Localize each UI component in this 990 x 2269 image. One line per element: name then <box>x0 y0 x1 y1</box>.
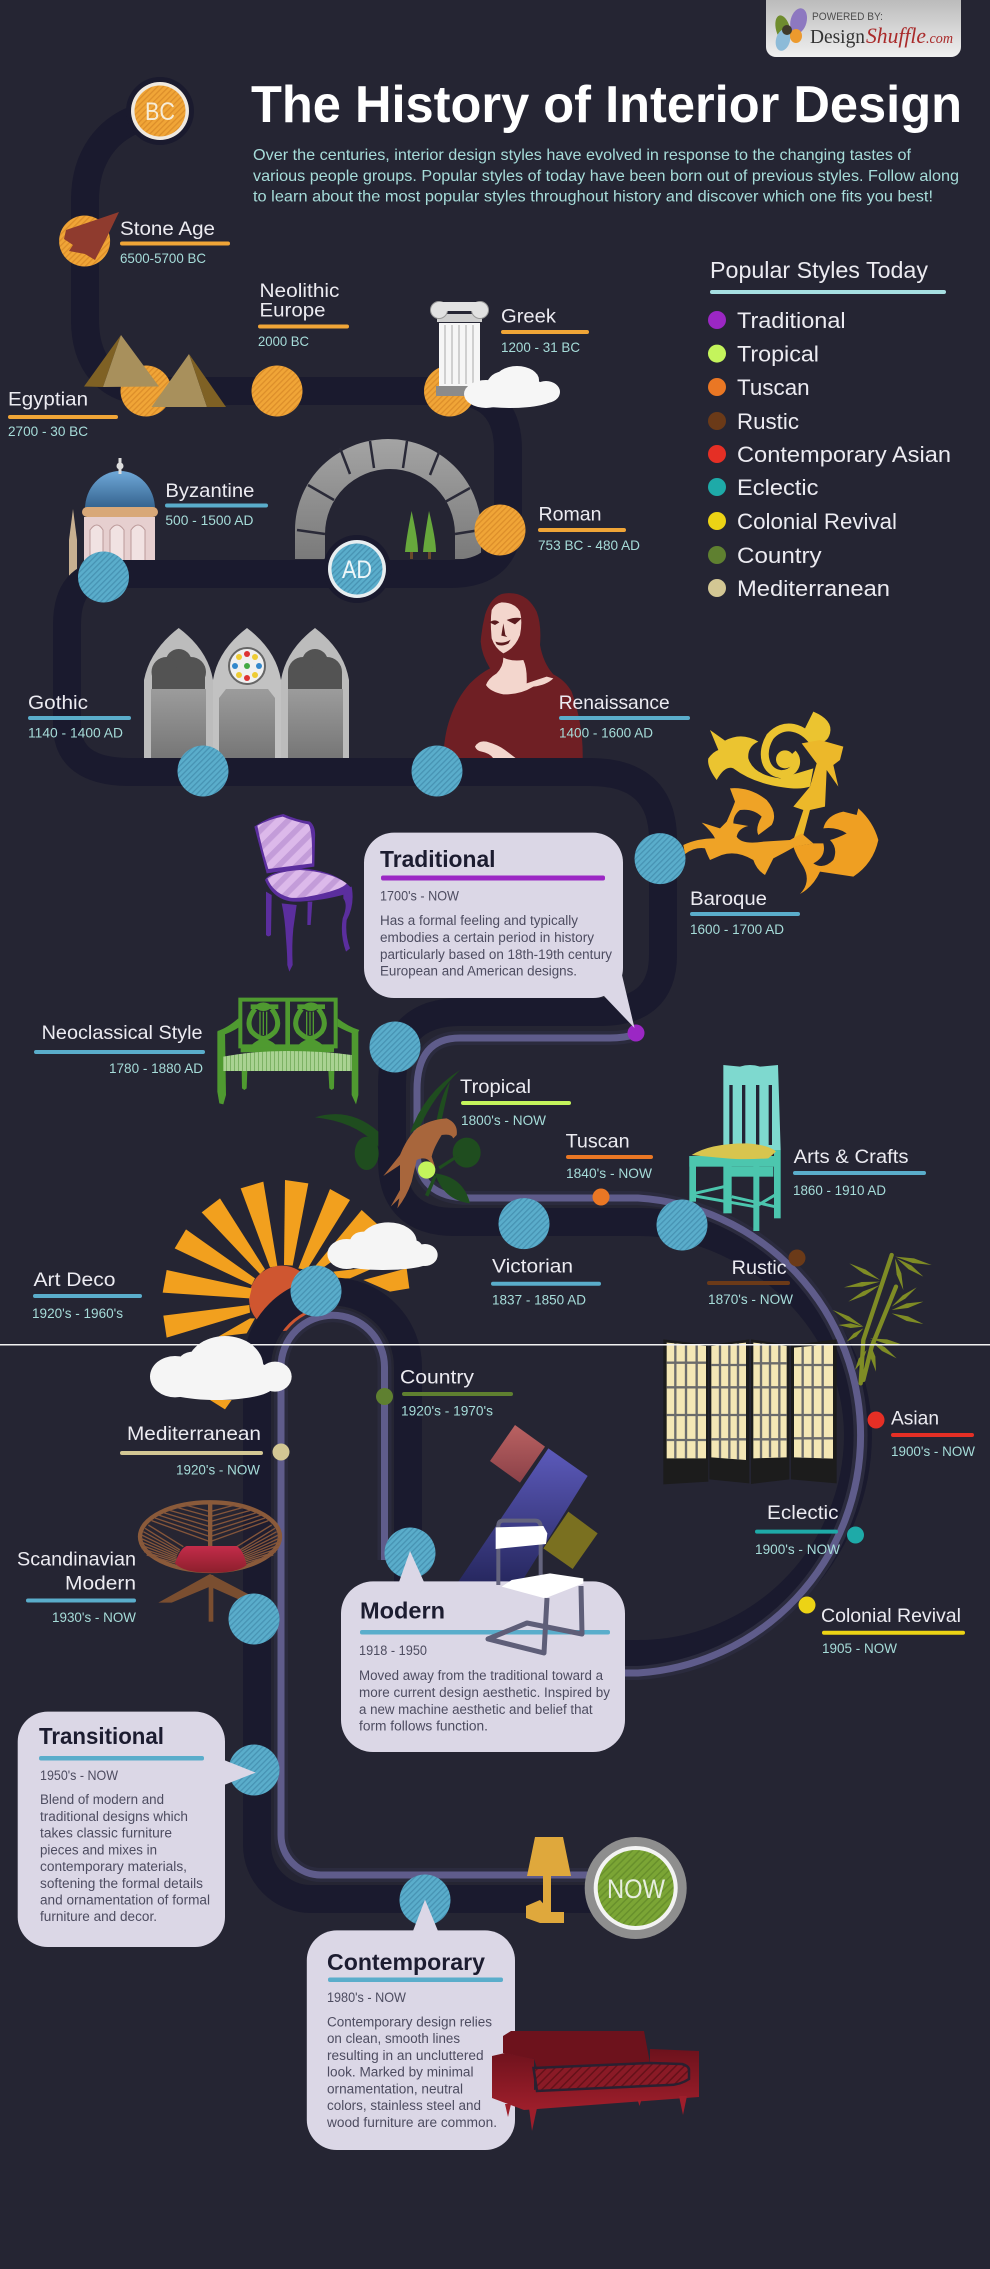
NOW marker <box>585 1837 687 1939</box>
label: Neolithic Europe: 2000 BC <box>258 333 309 349</box>
label: Baroque: 1600 - 1700 AD <box>690 921 784 937</box>
label: Gothic: Gothic <box>28 692 88 714</box>
label: Greek <box>501 306 589 355</box>
label: Victorian <box>491 1256 601 1308</box>
label: Tropical: Tropical <box>460 1076 531 1098</box>
callout: Contemporary: wood furniture are common. <box>326 2115 497 2130</box>
callout: Transitional: contemporary materials, <box>40 1859 187 1874</box>
BC marker: BC <box>145 98 175 126</box>
label: Art Deco <box>32 1269 142 1321</box>
label: Byzantine: 500 - 1500 AD <box>165 512 253 528</box>
label: Eclectic: Eclectic <box>767 1502 839 1524</box>
panel: popular styles legend: Colonial Revival <box>737 509 897 534</box>
logo: Design Shuffle <box>766 0 961 57</box>
panel: popular styles legend: Popular Styles Today <box>710 257 928 283</box>
label: Tuscan: Tuscan <box>566 1130 630 1152</box>
callout: Traditional: Has a formal feeling and typically <box>380 913 578 928</box>
label: Tropical <box>460 1076 571 1128</box>
label: Neolithic Europe: Europe <box>260 300 326 322</box>
callout: Transitional: Transitional <box>39 1723 164 1749</box>
callout: Modern: Modern <box>360 1598 445 1624</box>
callout: Modern: more current design aesthetic. Inspired by <box>359 1685 610 1700</box>
label: Byzantine <box>165 480 268 528</box>
callout: Transitional: and ornamentation of formal <box>40 1893 210 1908</box>
callout: Contemporary <box>307 1900 515 2150</box>
label: Eclectic <box>755 1502 841 1557</box>
callout: Transitional: Blend of modern and <box>40 1792 164 1807</box>
label: Colonial Revival <box>821 1605 965 1656</box>
label: Scandinavian Modern: Modern <box>65 1572 136 1594</box>
callout: Traditional <box>364 833 634 1028</box>
timeline track <box>67 115 858 1899</box>
panel: popular styles legend: Tropical <box>737 342 819 367</box>
callout: Modern <box>341 1551 625 1752</box>
label: Mediterranean: 1920's - NOW <box>176 1462 261 1478</box>
callout: Contemporary: resulting in an uncluttered <box>327 2048 484 2063</box>
panel: popular styles legend: Traditional <box>737 308 846 333</box>
label: Greek: Greek <box>501 306 556 328</box>
NOW marker: NOW <box>607 1874 665 1904</box>
label: Gothic: 1140 - 1400 AD <box>28 725 123 741</box>
label: Byzantine: Byzantine <box>165 480 254 502</box>
callout: Traditional: particularly based on 18th-19th century <box>380 947 612 962</box>
horizontal divider <box>0 1344 990 1346</box>
illustration: red sofa <box>492 2031 699 2131</box>
label: Tuscan: 1840's - NOW <box>566 1165 653 1181</box>
label: Arts and Crafts: 1860 - 1910 AD <box>793 1182 886 1198</box>
illustration: Neoclassical bench <box>217 998 359 1104</box>
label: Roman: 753 BC - 480 AD <box>538 537 640 553</box>
icon: Greek column with cloud <box>430 302 560 408</box>
label: Art Deco: 1920's - 1960's <box>32 1305 123 1321</box>
logo: Design Shuffle: POWERED BY: <box>812 11 883 23</box>
illustration: bamboo <box>833 1255 932 1383</box>
callout: Contemporary: Contemporary design relies <box>327 2015 492 2030</box>
label: Neoclassical Style: 1780 - 1880 AD <box>109 1060 203 1076</box>
callout: Contemporary: colors, stainless steel and <box>327 2098 481 2113</box>
panel: popular styles legend: Contemporary Asian <box>737 442 951 467</box>
panel: popular styles legend: Mediterranean <box>737 576 890 601</box>
label: Scandinavian Modern: Scandinavian <box>17 1549 136 1571</box>
panel: popular styles legend: Country <box>737 543 822 568</box>
label: Rustic: Rustic <box>732 1257 787 1279</box>
callout: Contemporary: ornamentation, neutral <box>327 2082 463 2097</box>
panel: popular styles legend: Rustic <box>737 409 799 434</box>
panel: popular styles legend <box>708 257 951 601</box>
label: Renaissance: Renaissance <box>559 692 670 714</box>
label: Eclectic: 1900's - NOW <box>755 1541 841 1557</box>
callout: Transitional: pieces and mixes in <box>40 1843 157 1858</box>
label: Asian: 1900's - NOW <box>891 1443 976 1459</box>
title: The History of Interior Design <box>251 76 962 134</box>
illustration: Roman stone arch <box>295 439 481 559</box>
label: Egyptian: Egyptian <box>8 389 88 411</box>
label: Renaissance: 1400 - 1600 AD <box>559 725 653 741</box>
label: Egyptian: 2700 - 30 BC <box>8 423 88 439</box>
label: Stone Age: 6500-5700 BC <box>120 250 206 266</box>
label: Country <box>400 1366 513 1419</box>
callout: Transitional <box>18 1712 256 1947</box>
label: Arts and Crafts: Arts & Crafts <box>794 1146 909 1168</box>
label: Country: 1920's - 1970's <box>401 1403 493 1419</box>
label: Egyptian <box>8 389 118 439</box>
callout: Traditional: European and American designs. <box>380 964 577 979</box>
callout: Contemporary: look. Marked by minimal <box>327 2065 474 2080</box>
AD marker: AD <box>342 556 372 584</box>
label: Scandinavian Modern: 1930's - NOW <box>52 1609 137 1625</box>
panel: popular styles legend: Eclectic <box>737 475 818 500</box>
label: Neoclassical Style <box>34 1022 205 1076</box>
illustration: Modern tubular chair <box>488 1521 583 1653</box>
illustration: tropical parrot and leaves <box>315 1070 481 1208</box>
illustration: Scandinavian rattan chair <box>140 1502 280 1622</box>
illustration: Byzantine dome <box>69 458 158 592</box>
illustration: Arts and Crafts chair <box>689 1065 781 1231</box>
AD marker <box>323 535 391 603</box>
label: Neolithic Europe: Neolithic <box>260 280 340 302</box>
label: Renaissance <box>559 692 690 741</box>
callout: Transitional: takes classic furniture <box>40 1826 172 1840</box>
callout: Modern: form follows function. <box>359 1719 488 1734</box>
callout: Transitional: traditional designs which <box>40 1809 188 1824</box>
callout: Traditional: Traditional <box>380 846 496 872</box>
label: Tuscan <box>566 1130 653 1181</box>
label: Colonial Revival: Colonial Revival <box>821 1605 961 1627</box>
label: Colonial Revival: 1905 - NOW <box>822 1640 898 1656</box>
intro text: Over the centuries, interior design styles have evolved in response to the changing tastes of <box>253 147 912 164</box>
label: Tropical: 1800's - NOW <box>461 1112 547 1128</box>
timeline nodes: blue AD era <box>78 552 708 1926</box>
callout: Contemporary: 1980's - NOW <box>327 1989 407 2005</box>
logo: Design Shuffle: .com <box>926 31 953 47</box>
label: Roman <box>538 504 640 553</box>
callout: Traditional: 1700's - NOW <box>380 888 460 904</box>
illustration: lamp <box>526 1837 571 1923</box>
label: Asian <box>891 1408 976 1459</box>
label: Greek: 1200 - 31 BC <box>501 339 580 355</box>
BC marker <box>126 77 194 145</box>
label: Rustic <box>707 1257 794 1307</box>
icon: stone arrowhead <box>64 212 119 260</box>
label: Mediterranean <box>120 1423 263 1478</box>
clouds over art deco sun <box>150 1222 438 1400</box>
label: Country: Country <box>400 1366 474 1388</box>
label: Stone Age: Stone Age <box>120 218 215 240</box>
purple line: popular styles path <box>281 1034 861 1875</box>
icon: pyramids <box>84 335 226 407</box>
timeline nodes: orange BC era <box>59 216 525 556</box>
label: Baroque <box>690 888 800 937</box>
callout: Modern: 1918 - 1950 <box>359 1642 427 1658</box>
label: Neoclassical Style: Neoclassical Style <box>42 1022 203 1044</box>
label: Victorian: 1837 - 1850 AD <box>492 1292 586 1308</box>
callout: Contemporary: on clean, smooth lines <box>327 2031 460 2046</box>
label: Stone Age <box>120 218 230 266</box>
label: Baroque: Baroque <box>690 888 767 910</box>
callout: Transitional: 1950's - NOW <box>40 1767 119 1783</box>
intro text <box>253 147 959 206</box>
illustration: Mona Lisa <box>443 593 583 758</box>
panel: popular styles legend: Tuscan <box>737 375 810 400</box>
callout: Modern: Moved away from the traditional toward a <box>359 1668 603 1683</box>
illustration: Asian shoji screen <box>663 1339 837 1484</box>
illustration: Gothic windows <box>144 628 349 758</box>
label: Scandinavian Modern <box>17 1549 137 1625</box>
label: Arts and Crafts <box>793 1146 926 1198</box>
callout: Transitional: softening the formal details <box>40 1876 203 1891</box>
callout: Transitional: furniture and decor. <box>40 1909 157 1924</box>
illustration: art deco sun <box>163 1180 409 1409</box>
legend dots on path <box>272 1024 884 1614</box>
label: Art Deco: Art Deco <box>34 1269 116 1291</box>
logo: Design Shuffle: Design <box>810 26 865 48</box>
callout: Modern: a new machine aesthetic and belief that <box>359 1702 593 1717</box>
label: Rustic: 1870's - NOW <box>708 1291 794 1307</box>
label: Mediterranean: Mediterranean <box>127 1423 261 1445</box>
callout: Contemporary: Contemporary <box>327 1949 485 1975</box>
label: Neolithic Europe <box>258 280 349 349</box>
label: Asian: Asian <box>891 1408 939 1430</box>
label: Victorian: Victorian <box>492 1256 573 1278</box>
intro text: various people groups. Popular styles of today have been born out of previous styles. Follow along <box>253 168 959 185</box>
label: Gothic <box>28 692 131 741</box>
label: Roman: Roman <box>538 504 602 526</box>
callout: Traditional: embodies a certain period in history <box>380 930 594 945</box>
logo: Design Shuffle: Shuffle <box>866 23 926 48</box>
illustration: Modern geometric shapes <box>458 1425 598 1582</box>
illustration: Traditional chair <box>254 814 353 972</box>
illustration: Baroque ornament <box>683 712 878 894</box>
intro text: to learn about the most popular styles throughout history and discover which one fits you best! <box>253 188 933 206</box>
